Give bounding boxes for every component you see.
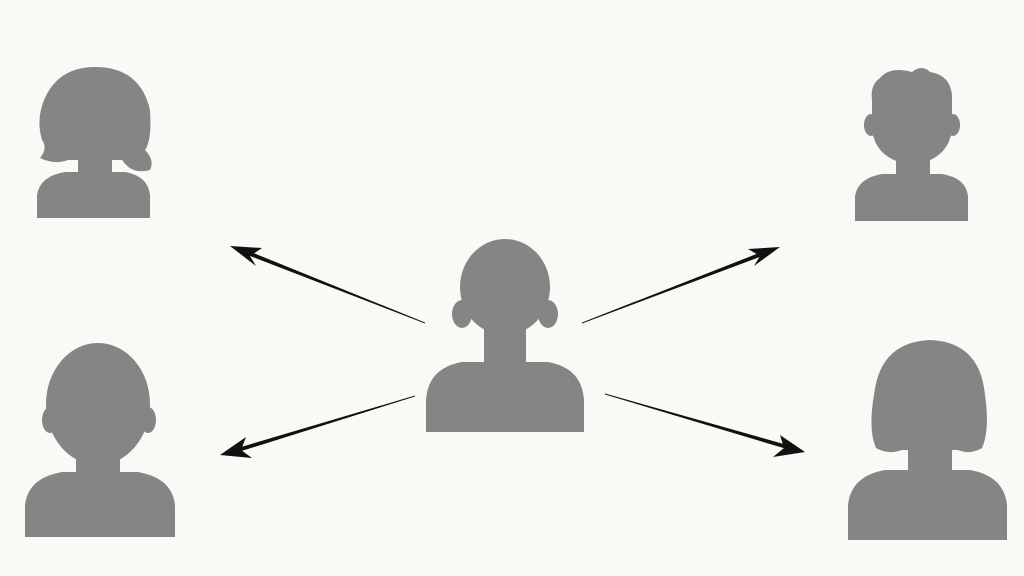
figure: top-left woman — [37, 67, 152, 218]
arrow: to top-left — [230, 246, 425, 324]
figure: top-right man — [855, 68, 968, 221]
figure: bottom-right woman — [848, 340, 1007, 540]
arrow: to top-right — [582, 247, 780, 324]
arrow: to bottom-right — [605, 394, 805, 457]
figure: center person — [426, 239, 584, 432]
figure: bottom-left child — [25, 343, 175, 537]
arrow: to bottom-left — [220, 396, 415, 458]
